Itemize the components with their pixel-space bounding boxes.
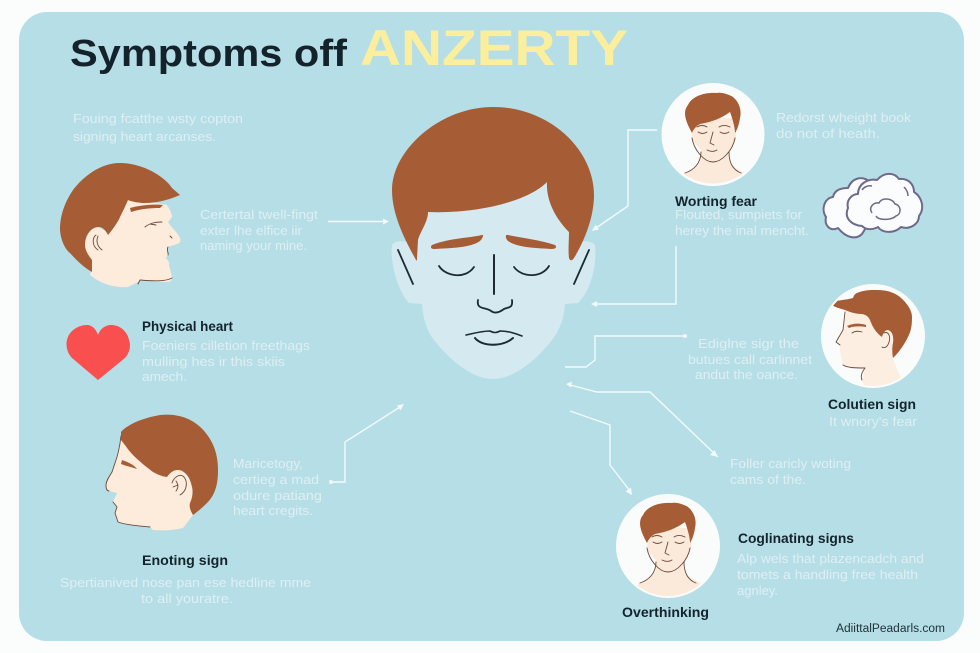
- text: enoting sign: Enoting sign: [142, 553, 228, 568]
- cloud: back layer: [824, 178, 880, 237]
- left top text: [73, 111, 243, 144]
- right text: top description: [776, 110, 912, 141]
- text: worting fear: Worting fear: [675, 194, 758, 209]
- text: coglinating signs: agnley.: [737, 583, 778, 598]
- arrow: worting fear to center: [591, 246, 676, 307]
- arrow: head to center: [328, 218, 389, 224]
- text: enoting sign: [60, 553, 311, 606]
- left top text: Fouing fcatthe wsty copton: [73, 111, 243, 126]
- left text: lower description: odure patiang: [233, 488, 322, 503]
- central face illustration: [392, 107, 595, 379]
- central face: eyes, nose, mouth and ear lines: [398, 250, 589, 345]
- profile head, facing left: [106, 415, 218, 530]
- text: edgline: andut the oance.: [695, 367, 798, 382]
- text: coglinating signs: [737, 531, 924, 598]
- text: physical heart: [142, 319, 311, 384]
- text: physical heart: amech.: [142, 369, 187, 384]
- right text: top description: Redorst wheight book: [776, 110, 912, 125]
- arrow: foller text to center: [566, 382, 718, 457]
- text: coglinating signs: Coglinating signs: [738, 531, 854, 546]
- text: worting fear: [675, 194, 809, 238]
- cloud: front layer: [847, 174, 922, 232]
- profile head, facing right: [60, 163, 180, 287]
- icon: heart: [67, 325, 130, 380]
- icon: bottom portrait: [616, 494, 720, 600]
- right text: top description: do not of heath.: [776, 126, 880, 141]
- left text: lower description: [233, 456, 322, 518]
- text: enoting sign: Spertianived nose pan ese hedline mme: [60, 575, 311, 590]
- text: worting fear: herey the inal mencht.: [675, 223, 809, 238]
- text: colutien sign: Colutien sign: [828, 397, 916, 412]
- text: edgline: [688, 336, 812, 382]
- icon: top right portrait: [662, 83, 764, 190]
- label: overthinking: Overthinking: [622, 605, 709, 620]
- left text: lower description: certieg a mad: [233, 472, 319, 487]
- text: coglinating signs: Alp wels that plazencadch and: [737, 551, 924, 566]
- icon: cloud: [824, 174, 922, 237]
- text: enoting sign: to all youratre.: [141, 591, 233, 606]
- text: foller: Foller caricly woting: [730, 456, 851, 471]
- title: Symptoms off: [70, 33, 347, 75]
- arrow: center to edgline text: [565, 334, 687, 367]
- left text: lower description: Maricetogy,: [233, 456, 303, 471]
- text: physical heart: mulling hes ir this skiis: [142, 354, 286, 369]
- title: [70, 20, 628, 76]
- left text: head description: Certertal twell-fingt: [200, 207, 318, 222]
- credit: AdiittalPeadarls.com: [836, 623, 945, 635]
- arrow: center to overthinking: [570, 411, 632, 495]
- text: worting fear: Flouted, sumpiets for: [675, 207, 803, 222]
- left text: lower description: heart cregits.: [233, 503, 313, 518]
- text: coglinating signs: tomets a handling free health: [737, 567, 918, 582]
- central face: eyebrows: [431, 235, 556, 249]
- text: physical heart: Physical heart: [142, 319, 234, 334]
- arrow: top right portrait to center: [592, 130, 657, 231]
- icon: right profile portrait: [821, 284, 925, 392]
- left text: head description: naming your mine.: [200, 238, 307, 253]
- text: physical heart: Foeniers cilletion freethags: [142, 338, 311, 353]
- title: ANZERTY: [360, 20, 628, 76]
- text: foller: cams of the.: [730, 472, 806, 487]
- left top text: signing heart arcanses.: [73, 129, 216, 144]
- text: edgline: Ediglne sigr the: [698, 336, 799, 351]
- left text: head description: [200, 207, 318, 253]
- central face: hair: [392, 107, 594, 261]
- text: colutien sign: [828, 397, 918, 429]
- cloud: inner curl: [862, 186, 908, 219]
- text: foller: [730, 456, 851, 487]
- central face: skin: [392, 180, 595, 379]
- arrow: lower left to center: [329, 404, 404, 484]
- text: edgline: butues call carlinnet: [688, 352, 812, 367]
- text: colutien sign: It wnory's fear: [829, 414, 918, 429]
- left text: head description: exter lhe elfice iir: [200, 223, 303, 238]
